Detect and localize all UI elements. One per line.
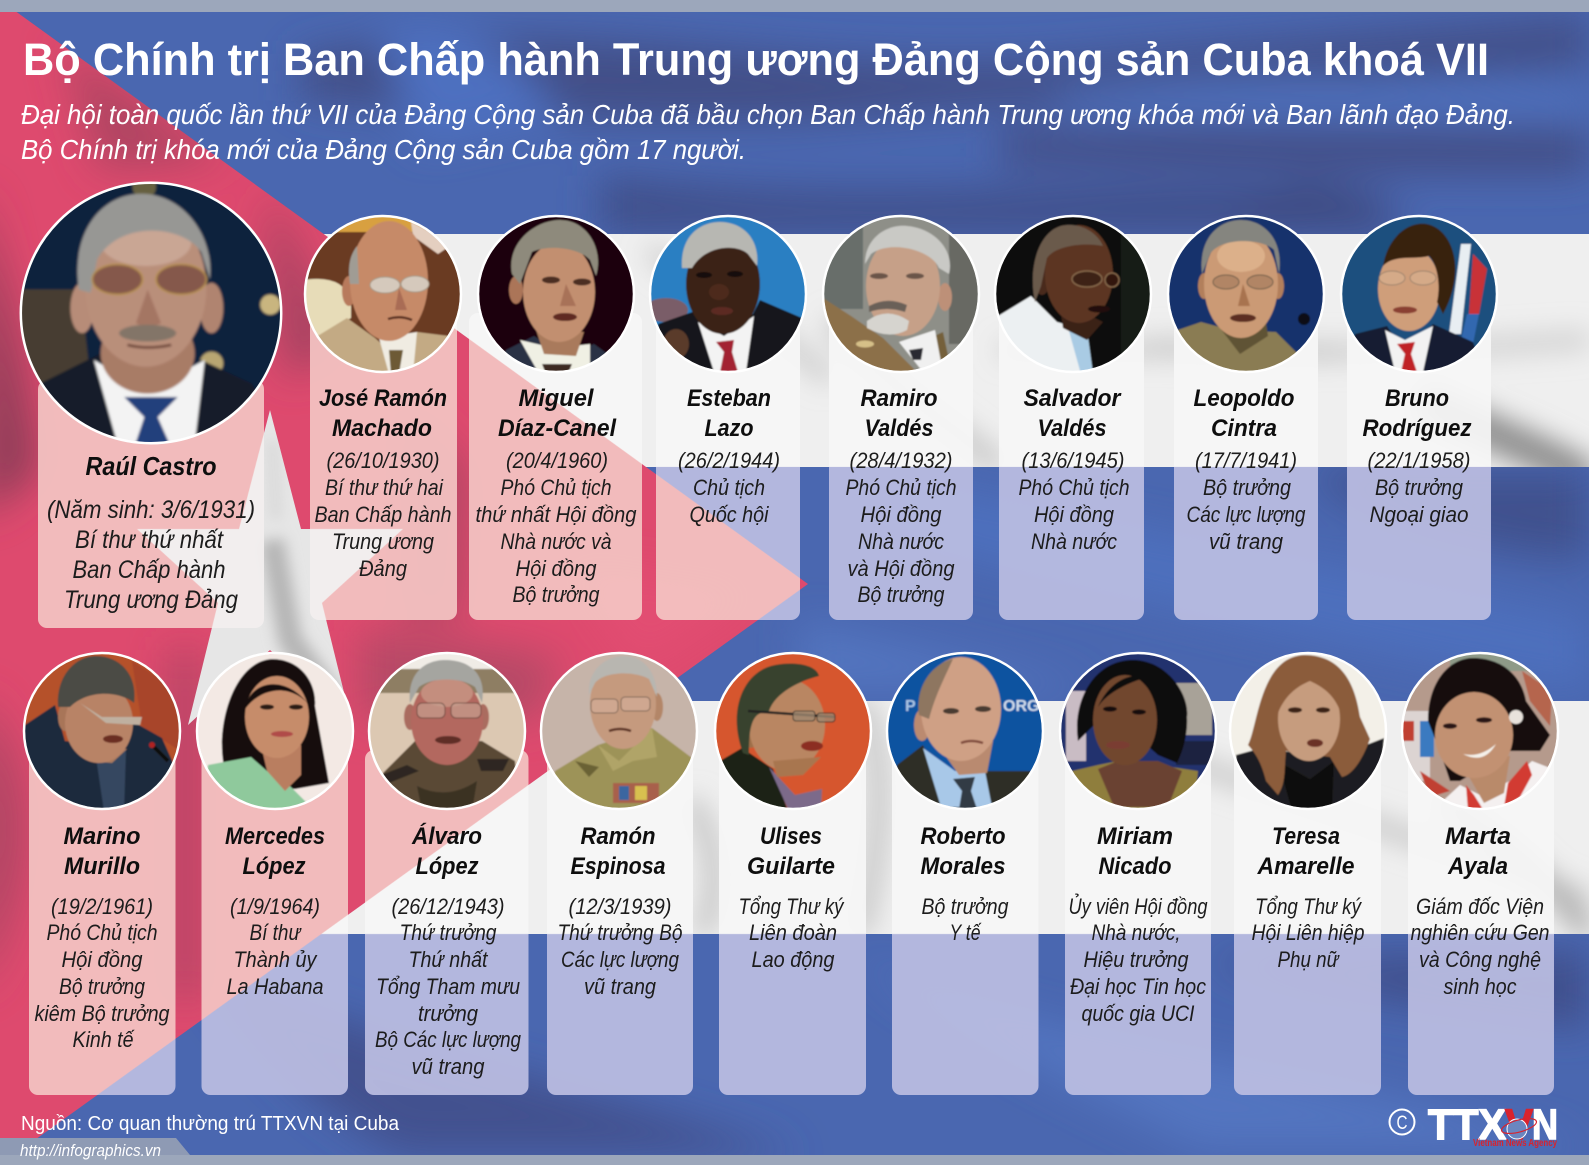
- panel: Mercedes López: [195, 651, 355, 1095]
- portrait: Esteban Lazo: [644, 214, 808, 374]
- portrait: Leopoldo Cintra: [1166, 214, 1326, 374]
- name: [1257, 823, 1354, 880]
- icon: copyright: C: [1396, 1113, 1408, 1134]
- name: Machado: [332, 415, 432, 442]
- details: Trung ương: [332, 529, 435, 554]
- details: quốc gia UCI: [1082, 1001, 1194, 1026]
- details: [1186, 448, 1306, 554]
- title: Bộ Chính trị Ban Chấp hành Trung ương Đảng Cộng sản Cuba khoá VII: [23, 34, 1489, 85]
- details: Ban Chấp hành: [314, 502, 452, 527]
- details: (20/4/1960): [506, 448, 608, 473]
- details: Bộ trưởng: [512, 582, 600, 607]
- name: Guilarte: [747, 853, 835, 880]
- name: [747, 823, 835, 880]
- name: Ayala: [1447, 853, 1508, 880]
- details: (Năm sinh: 3/6/1931): [47, 496, 255, 524]
- details: Bộ trưởng: [1375, 475, 1464, 500]
- details: vũ trang: [1209, 529, 1284, 554]
- details: [1068, 893, 1208, 1026]
- panel: Ramiro Valdés: [821, 214, 981, 620]
- details: Quốc hội: [690, 502, 769, 527]
- details: (26/2/1944): [678, 448, 780, 473]
- name: Morales: [920, 853, 1006, 880]
- name: Esteban: [687, 385, 771, 412]
- name: Salvador: [1024, 385, 1122, 412]
- details: [1018, 448, 1130, 554]
- portrait: Ramiro Valdés: [821, 214, 981, 374]
- panel: Salvador Valdés: [993, 214, 1153, 620]
- details: Phó Chủ tịch: [46, 920, 158, 945]
- details: Hội đồng: [860, 502, 942, 527]
- card: [202, 750, 348, 1095]
- name: Teresa: [1272, 823, 1340, 850]
- panel: Teresa Amarelle: [1228, 651, 1388, 1095]
- icon: copyright: [1390, 1110, 1414, 1134]
- details: Bí thư: [250, 920, 302, 945]
- details: Đảng: [359, 556, 408, 581]
- portrait: Ramón Espinosa: [539, 651, 699, 811]
- bottom bar: [0, 1138, 1589, 1165]
- name: Ramón: [580, 823, 656, 850]
- portrait: Salvador Valdés: [993, 214, 1153, 374]
- card: [892, 750, 1038, 1095]
- panel: Marta Ayala: [1400, 651, 1560, 1095]
- panel: José Ramón Machado: [303, 214, 463, 620]
- source note: Nguồn: Cơ quan thường trú TTXVN tại Cuba: [21, 1113, 400, 1135]
- portrait: Roberto Morales: [885, 651, 1045, 811]
- details: Liên đoàn: [749, 920, 837, 945]
- subtitle: Bộ Chính trị khóa mới của Đảng Cộng sản Cuba gồm 17 người.: [21, 134, 746, 165]
- name: Mercedes: [225, 823, 325, 850]
- name: Rodríguez: [1362, 415, 1472, 442]
- name: Bruno: [1385, 385, 1449, 412]
- details: Tổng Thư ký: [1255, 894, 1363, 919]
- card: [365, 750, 528, 1095]
- details: Tổng Tham mưu: [376, 974, 520, 999]
- logo: TTXVN: V: [1505, 1101, 1533, 1149]
- portrait: Roberto Morales: P: [905, 698, 916, 715]
- details: Giám đốc Viện: [1416, 894, 1544, 919]
- name: [920, 823, 1006, 880]
- details: Ủy viên Hội đồng: [1068, 893, 1208, 919]
- card: [656, 313, 800, 620]
- details: [738, 894, 845, 972]
- details: Bí thư thứ hai: [325, 475, 444, 500]
- panel: Álvaro López: [365, 651, 528, 1095]
- name: [225, 823, 325, 880]
- details: Ngoại giao: [1370, 502, 1468, 527]
- card: [829, 313, 973, 620]
- details: [314, 448, 452, 581]
- details: và Hội đồng: [848, 556, 955, 581]
- details: Hội đồng: [1034, 502, 1115, 527]
- details: Trung ương Đảng: [64, 586, 238, 614]
- panel: Marino Murillo: [22, 651, 182, 1095]
- details: Phó Chủ tịch: [1018, 475, 1130, 500]
- details: (1/9/1964): [230, 894, 320, 919]
- details: Nhà nước: [1031, 529, 1117, 554]
- panel: Leopoldo Cintra: [1166, 214, 1326, 620]
- details: Phụ nữ: [1278, 947, 1340, 972]
- details: (26/10/1930): [326, 448, 440, 473]
- name: Nicado: [1098, 853, 1172, 880]
- website url: http://infographics.vn: [20, 1141, 161, 1160]
- name: Valdés: [864, 415, 934, 442]
- details: và Công nghệ: [1419, 947, 1541, 972]
- portrait: Marino Murillo: [22, 651, 182, 811]
- details: (17/7/1941): [1195, 448, 1297, 473]
- portrait: Miriam Nicado: [1058, 651, 1218, 811]
- card: [1065, 750, 1211, 1095]
- card: [469, 313, 642, 620]
- subtitle: [21, 99, 1515, 165]
- name: Álvaro: [411, 822, 482, 850]
- details: Bộ trưởng: [1203, 475, 1292, 500]
- card: [1347, 313, 1491, 620]
- details: [34, 894, 170, 1052]
- details: Hội đồng: [516, 556, 597, 581]
- details: Phó Chủ tịch: [500, 475, 612, 500]
- portrait: José Ramón Machado: [303, 214, 463, 374]
- details: Thứ trưởng Bộ: [558, 920, 682, 945]
- details: Nhà nước và: [500, 529, 612, 554]
- name: Leopoldo: [1194, 385, 1294, 412]
- name: Cintra: [1211, 415, 1277, 442]
- details: La Habana: [226, 974, 324, 999]
- logo: TTXVN: N: [1532, 1101, 1558, 1149]
- top bar: [0, 0, 1589, 12]
- name: [687, 385, 771, 442]
- details: (19/2/1961): [51, 894, 153, 919]
- details: (12/3/1939): [568, 894, 672, 919]
- details: Chủ tịch: [693, 475, 765, 500]
- name: Murillo: [64, 853, 140, 880]
- details: (22/1/1958): [1368, 448, 1470, 473]
- panel: Raúl Castro: [17, 175, 285, 628]
- name: Díaz-Canel: [498, 415, 617, 442]
- details: Bộ trưởng: [59, 974, 146, 999]
- details: (13/6/1945): [1022, 448, 1124, 473]
- name: Espinosa: [570, 853, 666, 880]
- portrait: Raúl Castro: [17, 175, 285, 447]
- details: vũ trang: [584, 974, 657, 999]
- details: [1410, 894, 1550, 999]
- details: Thành ủy: [234, 947, 318, 972]
- name: Marino: [64, 823, 140, 850]
- details: Hiệu trưởng: [1084, 947, 1189, 972]
- card: [29, 750, 176, 1095]
- portrait: Ulises Guilarte: [713, 651, 873, 811]
- panel: Ramón Espinosa: [539, 651, 699, 1095]
- name: Miriam: [1097, 823, 1173, 850]
- decorative star: [137, 410, 403, 725]
- name: Raúl Castro: [86, 451, 217, 481]
- details: Bộ trưởng: [858, 582, 945, 607]
- name: [570, 823, 666, 880]
- details: trưởng: [418, 1001, 479, 1026]
- details: thứ nhất Hội đồng: [476, 502, 637, 527]
- details: [226, 894, 324, 999]
- name: [1445, 823, 1511, 880]
- portrait: Bruno Rodríguez: [1339, 214, 1499, 374]
- card: [38, 380, 264, 628]
- name: Amarelle: [1257, 853, 1354, 880]
- card: [1174, 313, 1318, 620]
- details: [476, 448, 637, 607]
- details: nghiên cứu Gen: [1410, 920, 1550, 945]
- name: Lazo: [704, 415, 754, 442]
- name: Ramiro: [860, 385, 938, 412]
- panel: Ulises Guilarte: [713, 651, 873, 1095]
- details: Hội Liên hiệp: [1252, 920, 1364, 945]
- name: [64, 823, 140, 880]
- name: Roberto: [920, 823, 1006, 850]
- name: Miguel: [518, 385, 595, 412]
- card: [1408, 750, 1554, 1095]
- name: Ulises: [760, 823, 822, 850]
- card: [719, 750, 866, 1095]
- name: Marta: [1445, 823, 1511, 850]
- panel: Bruno Rodríguez: [1339, 214, 1499, 620]
- details: Nhà nước,: [1092, 920, 1180, 945]
- card: [1234, 750, 1381, 1095]
- details: [678, 448, 780, 527]
- details: sinh học: [1444, 974, 1516, 999]
- subtitle: Đại hội toàn quốc lần thứ VII của Đảng Cộng sản Cuba đã bầu chọn Ban Chấp hành Trung ương khóa mới và Ban lãnh đạo Đảng.: [21, 99, 1515, 130]
- panel: Miguel Díaz-Canel: [469, 214, 642, 620]
- details: Thứ nhất: [408, 947, 488, 972]
- details: [558, 894, 682, 999]
- name: [498, 385, 617, 442]
- details: [1252, 894, 1364, 972]
- name: [319, 385, 447, 442]
- card: [999, 313, 1144, 620]
- details: (28/4/1932): [850, 448, 952, 473]
- portrait: Teresa Amarelle: [1228, 651, 1388, 811]
- panel: Esteban Lazo: [644, 214, 808, 620]
- card: [547, 750, 693, 1095]
- details: Phó Chủ tịch: [846, 475, 956, 500]
- details: [846, 448, 956, 607]
- portrait: Miguel Díaz-Canel: [476, 214, 636, 374]
- details: [1368, 448, 1470, 527]
- portrait: Álvaro López: [367, 651, 527, 811]
- portrait: Mercedes López: [195, 651, 355, 811]
- details: Hội đồng: [62, 947, 143, 972]
- portrait: Roberto Morales: ORG: [1003, 698, 1039, 715]
- name: [411, 822, 482, 880]
- details: Bộ Các lực lượng: [375, 1027, 522, 1052]
- details: Ban Chấp hành: [72, 556, 226, 584]
- details: Y tế: [950, 920, 982, 945]
- details: kiêm Bộ trưởng: [34, 1001, 170, 1026]
- details: Nhà nước: [858, 529, 944, 554]
- details: Các lực lượng: [561, 947, 680, 972]
- logo: TTXVN: Vietnam News Agency: [1473, 1138, 1557, 1149]
- details: Lao động: [752, 947, 835, 972]
- card: [310, 313, 457, 620]
- details: Kinh tế: [72, 1027, 135, 1052]
- name: José Ramón: [319, 385, 447, 412]
- details: (26/12/1943): [392, 894, 504, 919]
- panel: Roberto Morales: [885, 651, 1045, 1095]
- details: Bí thư thứ nhất: [75, 526, 224, 554]
- name: Valdés: [1038, 415, 1106, 442]
- details: [375, 894, 522, 1079]
- name: [1097, 823, 1173, 880]
- logo: TTXVN: TTX: [1428, 1101, 1506, 1149]
- name: [860, 385, 938, 442]
- name: [1362, 385, 1472, 442]
- logo: TTXVN: [1428, 1101, 1558, 1149]
- details: Tổng Thư ký: [738, 894, 845, 919]
- details: vũ trang: [412, 1054, 485, 1079]
- details: [47, 496, 255, 614]
- name: [1024, 385, 1122, 442]
- panel: Miriam Nicado: [1058, 651, 1218, 1095]
- details: Bộ trưởng: [922, 894, 1009, 919]
- details: Đại học Tin học: [1070, 974, 1206, 999]
- name: López: [416, 853, 478, 880]
- name: [1194, 385, 1294, 442]
- details: Thứ trưởng: [400, 920, 497, 945]
- name: López: [242, 853, 306, 880]
- details: [922, 894, 1009, 945]
- details: Các lực lượng: [1186, 502, 1306, 527]
- portrait: Marta Ayala: [1400, 651, 1560, 811]
